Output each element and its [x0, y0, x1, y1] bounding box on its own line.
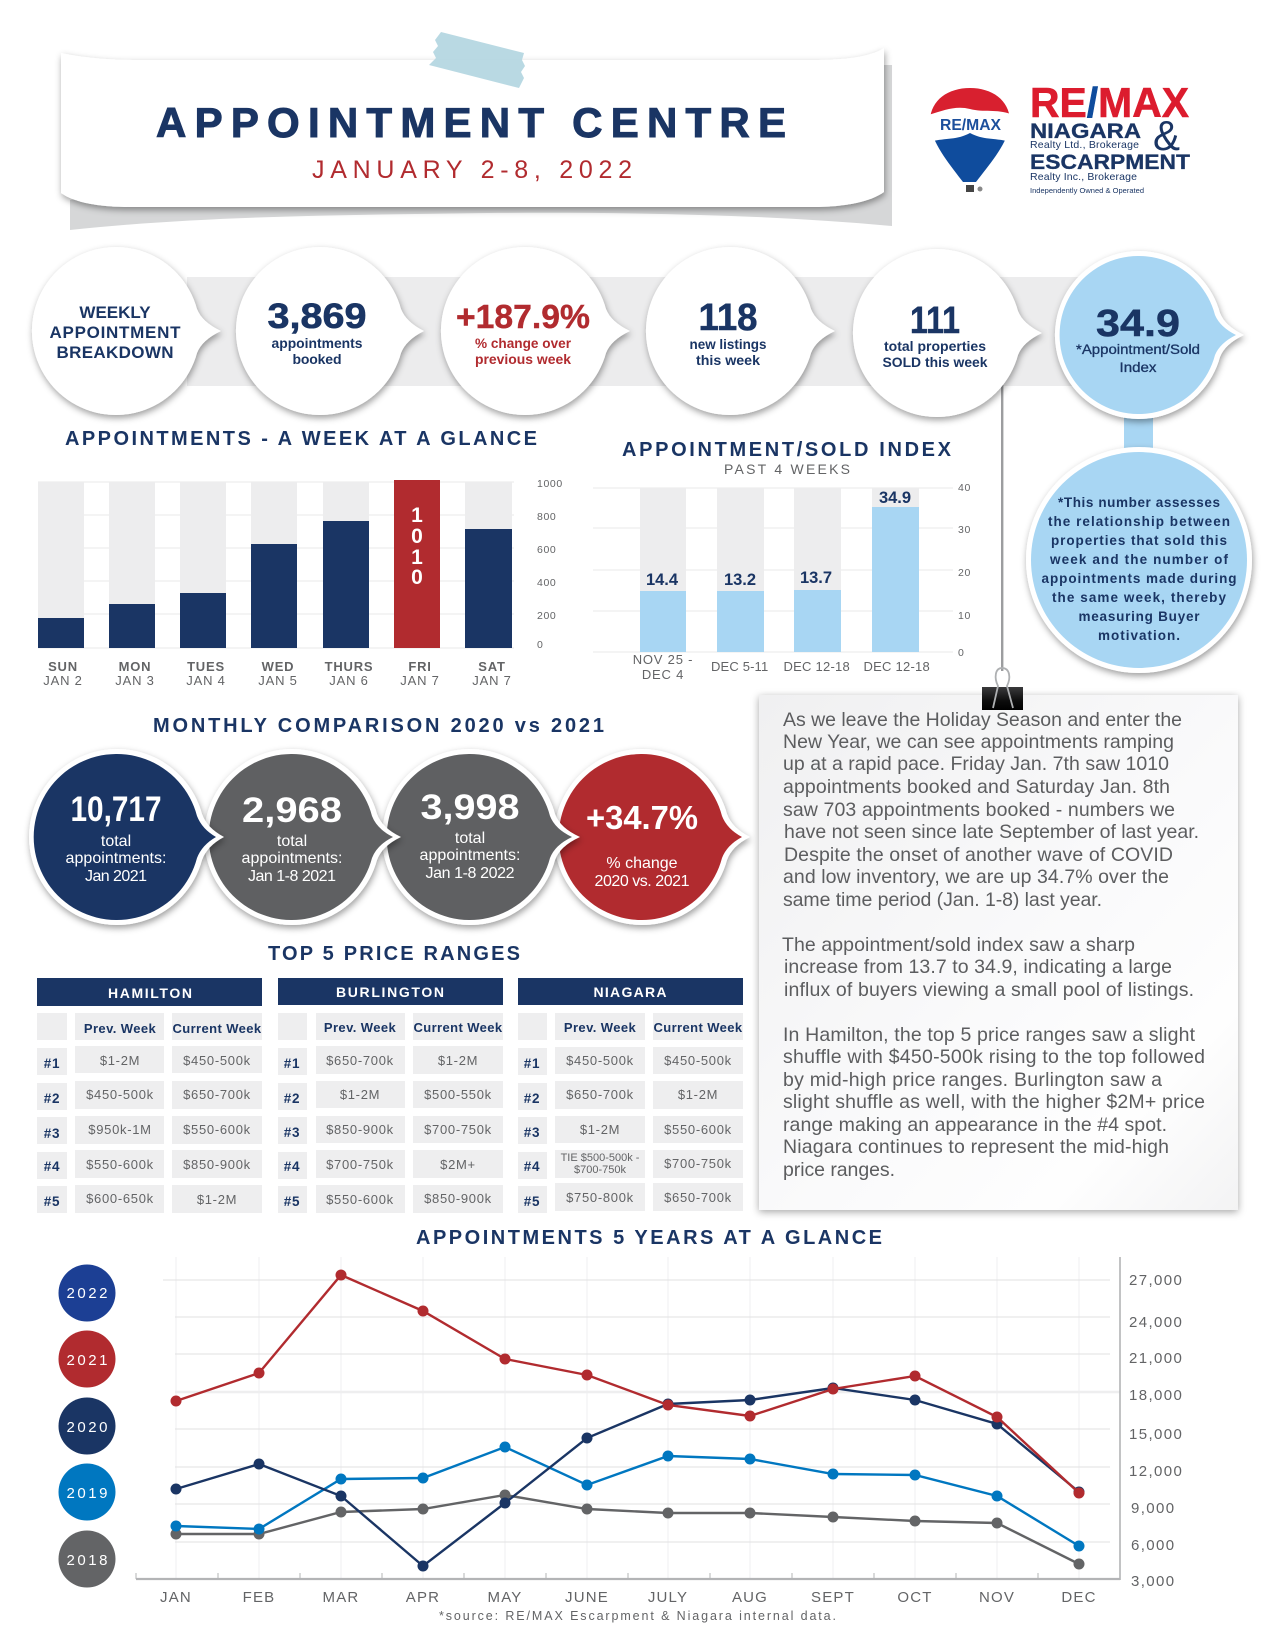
table: Hamilton: $650-700k — [183, 1087, 251, 1102]
text block: slight shuffle as well, with the higher $2M+ price — [783, 1091, 1205, 1113]
table: Niagara: $750-800k — [566, 1190, 634, 1205]
bar chart: appointment sold index: 0 — [958, 647, 964, 659]
table: Niagara: $650-700k — [566, 1087, 634, 1102]
circle: percent change over previous week: previous week — [475, 351, 571, 367]
callout: index explanation — [1026, 447, 1252, 673]
table: Hamilton: #3 — [44, 1126, 60, 1141]
table: Burlington: $500-550k — [424, 1087, 492, 1102]
callout: index explanation: properties that sold this — [1051, 533, 1227, 548]
text block: The appointment/sold index saw a sharp — [782, 934, 1135, 956]
table: Niagara: TIE $500-500k - — [561, 1152, 640, 1164]
x axis labels: MAY — [488, 1589, 522, 1606]
legend 2020: 2020 — [66, 1419, 108, 1436]
logo: RE/MAX Niagara and Escarpment: & — [1153, 112, 1180, 159]
x axis labels: FEB — [243, 1589, 275, 1606]
y axis labels: 3,000 — [1131, 1573, 1176, 1590]
circle: total properties sold: SOLD this week — [882, 354, 988, 370]
table: Hamilton: #1 — [44, 1056, 60, 1071]
bar chart: appointments by day: THURS — [325, 659, 373, 674]
callout: index explanation: motivation. — [1098, 628, 1180, 643]
heading: appointment sold index: APPOINTMENT/SOLD INDEX — [622, 439, 952, 461]
table: Burlington: $850-900k — [326, 1122, 394, 1137]
bar chart: appointment sold index: 10 — [958, 610, 971, 622]
heading: week at a glance: APPOINTMENTS - A WEEK AT A GLANCE — [65, 428, 537, 450]
text block: influx of buyers viewing a small pool of listings. — [784, 979, 1194, 1001]
text block: up at a rapid pace. Friday Jan. 7th saw 1010 — [783, 753, 1169, 775]
date text: JANUARY 2-8, 2022 — [312, 156, 632, 184]
table: Niagara: #2 — [524, 1091, 540, 1106]
legend 2019 — [58, 1464, 116, 1520]
logo: RE/MAX Niagara and Escarpment: Realty Inc., Brokerage — [1030, 171, 1137, 183]
bar chart: appointment sold index: DEC 5-11 — [711, 659, 769, 674]
table: Hamilton: $450-500k — [86, 1087, 154, 1102]
text block: Despite the onset of another wave of COVID — [784, 844, 1173, 866]
circle: weekly appointment breakdown — [32, 247, 221, 415]
series 2021 — [170, 1270, 1084, 1498]
x axis labels: NOV — [979, 1589, 1015, 1606]
legend 2022: 2022 — [66, 1285, 108, 1302]
x axis labels: OCT — [897, 1589, 933, 1606]
circle: weekly appointment breakdown: WEEKLY — [79, 303, 151, 322]
circle: appointments booked: 3,869 — [268, 297, 366, 336]
bar chart: appointment sold index: DEC 4 — [642, 667, 684, 682]
bar chart: appointments by day: JAN 7 — [472, 673, 512, 688]
table: Niagara: $650-700k — [664, 1190, 732, 1205]
bar chart: appointment sold index: 13.2 — [724, 571, 756, 589]
bar chart: appointment sold index: DEC 12-18 — [784, 659, 850, 674]
circle: appointment sold index — [1055, 251, 1244, 419]
table: Burlington: $1-2M — [438, 1053, 478, 1068]
banner paper — [61, 48, 884, 207]
table: Hamilton: $450-500k — [183, 1053, 251, 1068]
circle: appointments booked: appointments — [272, 335, 363, 351]
table: Burlington: $700-750k — [424, 1122, 492, 1137]
heading: appointment sold index — [622, 439, 952, 477]
logo: RE/MAX Niagara and Escarpment — [925, 79, 1190, 195]
heading: top 5 price ranges: TOP 5 PRICE RANGES — [268, 943, 520, 965]
x axis labels: JULY — [648, 1589, 688, 1606]
series 2020 — [170, 1382, 1084, 1572]
y axis labels: 15,000 — [1129, 1426, 1183, 1443]
table: Niagara: Current Week — [653, 1020, 743, 1035]
legend 2019: 2019 — [66, 1485, 108, 1502]
table: Niagara: NIAGARA — [594, 984, 666, 1000]
bar chart: appointments by day: SUN — [48, 659, 78, 674]
legend 2020 — [58, 1398, 116, 1454]
circle: appointment sold index: 34.9 — [1096, 303, 1180, 345]
bar chart: appointment sold index: 30 — [958, 524, 971, 536]
table: Burlington: $650-700k — [326, 1053, 394, 1068]
table: Niagara: #1 — [524, 1056, 540, 1071]
bar chart: appointments by day: JAN 6 — [329, 673, 369, 688]
bar chart: appointments by day: 0 — [411, 525, 423, 548]
y axis labels: 6,000 — [1131, 1537, 1176, 1554]
callout: index explanation: *This number assesses — [1058, 495, 1220, 510]
table: Hamilton: $1-2M — [197, 1192, 237, 1207]
circle: total appointments Jan 1-8 2021: 2,968 — [242, 791, 342, 830]
bar chart: appointment sold index: 40 — [958, 482, 971, 494]
table: Burlington: $550-600k — [326, 1192, 394, 1207]
circle: total appointments Jan 1-8 2021: total — [277, 833, 307, 850]
heading: five years at a glance: APPOINTMENTS 5 YEARS AT A GLANCE — [416, 1227, 882, 1249]
bar chart: appointments by day: FRI — [408, 659, 432, 674]
table: Niagara: #5 — [524, 1194, 540, 1209]
line chart: appointments five years — [136, 1257, 1183, 1606]
circle: new listings: new listings — [690, 336, 767, 352]
bar chart: appointments by day: 800 — [537, 511, 556, 523]
bar chart: appointment sold index: NOV 25 - — [633, 652, 693, 667]
text block: appointments booked and Saturday Jan. 8th — [783, 776, 1170, 798]
bar chart: appointment sold index — [593, 482, 971, 682]
table: Hamilton: $950k-1M — [88, 1122, 152, 1137]
connector: index to callout — [1124, 415, 1153, 450]
table: Burlington: $1-2M — [340, 1087, 380, 1102]
bar chart: appointments by day — [38, 478, 563, 688]
text block: have not seen since late September of last year. — [784, 821, 1199, 843]
logo: RE/MAX Niagara and Escarpment: Independently Owned & Operated — [1030, 186, 1144, 195]
axes — [136, 1257, 1120, 1580]
x axis labels: SEPT — [811, 1589, 855, 1606]
circle: appointment sold index: *Appointment/Sold — [1076, 342, 1200, 357]
bar chart: appointments by day: 1 — [411, 504, 423, 527]
icon: binder clip — [982, 668, 1023, 710]
circle: total properties sold: total properties — [884, 338, 986, 354]
table: Burlington: Prev. Week — [324, 1020, 396, 1035]
circle: appointment sold index: Index — [1120, 360, 1157, 375]
table: Hamilton: Prev. Week — [84, 1021, 156, 1036]
text block: price ranges. — [783, 1159, 895, 1181]
table: Niagara: #4 — [524, 1159, 540, 1174]
x axis labels: JAN — [160, 1589, 192, 1606]
circle: total properties sold: 111 — [910, 300, 960, 342]
heading: appointment sold index: PAST 4 WEEKS — [724, 461, 850, 477]
heading: monthly comparison: MONTHLY COMPARISON 2020 vs 2021 — [153, 715, 604, 737]
text block: by mid-high price ranges. Burlington saw a — [783, 1069, 1162, 1091]
bar chart: appointments by day: 200 — [537, 610, 556, 622]
circle: total appointments Jan 1-8 2022: appointments: — [420, 847, 520, 864]
x axis labels: MAR — [323, 1589, 359, 1606]
legend 2018 — [58, 1530, 116, 1588]
circle: total appointments Jan 1-8 2022: Jan 1-8 2022 — [426, 865, 515, 882]
circle: total appointments Jan 1-8 2022: 3,998 — [420, 788, 520, 827]
circle: percent change 2020 vs 2021 — [554, 749, 750, 925]
icon: hot air balloon: RE/MAX — [940, 117, 1001, 134]
circle: total properties sold — [853, 249, 1042, 417]
table: Hamilton: HAMILTON — [108, 985, 192, 1001]
text block: Niagara continues to represent the mid-high — [783, 1136, 1169, 1158]
table: Hamilton: $1-2M — [100, 1053, 140, 1068]
circle: new listings — [646, 247, 835, 415]
logo: RE/MAX Niagara and Escarpment: NIAGARA — [1030, 120, 1141, 143]
circle: appointments booked: booked — [292, 351, 342, 367]
table: Hamilton: #5 — [44, 1194, 60, 1209]
table: Hamilton: #2 — [44, 1091, 60, 1106]
circle: total appointments Jan 2021: Jan 2021 — [85, 868, 147, 885]
table: Niagara: Prev. Week — [564, 1020, 636, 1035]
table: Burlington: #1 — [284, 1056, 300, 1071]
table: Burlington — [278, 978, 503, 1213]
table: Niagara: $700-750k — [664, 1156, 732, 1171]
circle: weekly appointment breakdown: BREAKDOWN — [56, 343, 174, 362]
bar chart: appointments by day: 1 — [411, 546, 423, 569]
legend 2022 — [58, 1264, 116, 1322]
circle: total appointments Jan 1-8 2022 — [382, 749, 580, 925]
callout: index explanation: measuring Buyer — [1078, 609, 1200, 624]
circle: total appointments Jan 2021 — [29, 749, 224, 925]
circle: new listings: 118 — [698, 297, 758, 339]
circle: total appointments Jan 1-8 2021: Jan 1-8 2021 — [248, 868, 336, 885]
text block: saw 703 appointments booked - numbers we — [783, 799, 1175, 821]
callout: index explanation: the relationship between — [1048, 514, 1230, 529]
bar chart: appointments by day: MON — [119, 659, 151, 674]
table: Niagara — [518, 978, 743, 1213]
table: Hamilton: $850-900k — [183, 1157, 251, 1172]
circle: percent change over previous week: % change over — [475, 335, 572, 351]
bar chart: appointments by day: JAN 3 — [115, 673, 155, 688]
bar chart: appointment sold index: 14.4 — [646, 571, 679, 589]
bar chart: appointment sold index: DEC 12-18 — [864, 659, 930, 674]
text block: same time period (Jan. 1-8) last year. — [783, 889, 1102, 911]
table: Niagara: $1-2M — [678, 1087, 718, 1102]
bar chart: appointments by day: JAN 5 — [258, 673, 298, 688]
bar chart: appointments by day: TUES — [187, 659, 225, 674]
text block: range making an appearance in the #4 spot. — [783, 1114, 1167, 1136]
circle: percent change over previous week: +187.9% — [456, 298, 590, 335]
circle: total appointments Jan 2021: total — [101, 833, 131, 850]
table: Niagara: $1-2M — [580, 1122, 620, 1137]
y axis labels — [1129, 1272, 1183, 1590]
bar chart: appointments by day: 0 — [411, 566, 423, 589]
bar chart: appointments by day: JAN 4 — [186, 673, 226, 688]
y axis labels: 9,000 — [1131, 1500, 1176, 1517]
x axis labels: APR — [406, 1589, 440, 1606]
callout: index explanation: the same week, thereby — [1052, 590, 1226, 605]
circle: percent change 2020 vs 2021: % change — [606, 855, 678, 872]
circle: total appointments Jan 2021: appointments: — [66, 850, 166, 867]
table: Niagara: $550-600k — [664, 1122, 732, 1137]
text block: In Hamilton, the top 5 price ranges saw a slight — [783, 1024, 1196, 1046]
bar chart: appointments by day: 400 — [537, 577, 556, 589]
table: Burlington: $2M+ — [440, 1157, 476, 1172]
panel: commentary — [759, 668, 1238, 1210]
series 2018 — [170, 1490, 1084, 1570]
bar chart: appointments by day: WED — [262, 659, 294, 674]
series 2019 — [170, 1442, 1084, 1552]
title banner — [61, 32, 892, 230]
text block: and low inventory, we are up 34.7% over the — [783, 866, 1169, 888]
legend: years — [58, 1264, 116, 1588]
table: Niagara: $700-750k — [574, 1164, 626, 1176]
table: Hamilton: Current Week — [172, 1021, 262, 1036]
bar chart: appointments by day: 600 — [537, 544, 556, 556]
title text: APPOINTMENT CENTRE — [156, 99, 786, 146]
logo: RE/MAX Niagara and Escarpment: ESCARPMENT — [1030, 151, 1190, 174]
table: Niagara: $450-500k — [664, 1053, 732, 1068]
text block: shuffle with $450-500k rising to the top followed — [783, 1046, 1205, 1068]
table: Burlington: $700-750k — [326, 1157, 394, 1172]
bar chart: appointments by day: 0 — [537, 639, 543, 651]
table: Burlington: #5 — [284, 1194, 300, 1209]
table: Burlington: #3 — [284, 1125, 300, 1140]
table: Hamilton: $550-600k — [183, 1122, 251, 1137]
circle: total appointments Jan 1-8 2022: total — [455, 830, 485, 847]
circle: appointments booked — [236, 247, 424, 415]
legend 2021 — [58, 1330, 116, 1388]
x axis labels: AUG — [732, 1589, 768, 1606]
bar chart: appointments by day: JAN 2 — [43, 673, 83, 688]
y axis labels: 12,000 — [1129, 1463, 1183, 1480]
icon: hot air balloon — [930, 88, 1009, 192]
source note: *source: RE/MAX Escarpment & Niagara internal data. — [439, 1609, 836, 1623]
circle: percent change 2020 vs 2021: +34.7% — [586, 799, 698, 836]
x axis labels: JUNE — [565, 1589, 609, 1606]
table: Burlington: Current Week — [413, 1020, 503, 1035]
table: Hamilton: $550-600k — [86, 1157, 154, 1172]
table: Burlington: #4 — [284, 1159, 300, 1174]
circle: new listings: this week — [696, 352, 760, 368]
text block: As we leave the Holiday Season and enter the — [783, 709, 1182, 731]
callout: index explanation: week and the number of — [1049, 552, 1228, 567]
y axis labels: 24,000 — [1129, 1314, 1183, 1331]
tape — [429, 32, 525, 88]
connector line to clip — [1001, 385, 1003, 671]
table: Niagara: #3 — [524, 1125, 540, 1140]
logo: RE/MAX Niagara and Escarpment: Realty Ltd., Brokerage — [1030, 139, 1139, 151]
text block: New Year, we can see appointments ramping — [783, 731, 1174, 753]
bar chart: appointment sold index: 34.9 — [879, 489, 911, 507]
band behind weekly circles — [187, 277, 1100, 386]
table: Hamilton: $600-650k — [86, 1191, 154, 1206]
table: Niagara: $450-500k — [566, 1053, 634, 1068]
table: Burlington: BURLINGTON — [336, 984, 444, 1000]
circle: total appointments Jan 1-8 2021 — [204, 749, 401, 925]
text block: increase from 13.7 to 34.9, indicating a large — [784, 956, 1172, 978]
circle: total appointments Jan 2021: 10,717 — [70, 790, 162, 829]
callout: index explanation: appointments made during — [1042, 571, 1236, 586]
legend 2018: 2018 — [66, 1552, 108, 1569]
circle: weekly appointment breakdown: APPOINTMENT — [50, 323, 181, 342]
circle: total appointments Jan 1-8 2021: appointments: — [242, 850, 342, 867]
table: Hamilton: #4 — [44, 1159, 60, 1174]
table: Hamilton — [37, 978, 262, 1213]
legend 2021: 2021 — [66, 1352, 108, 1369]
y axis labels: 21,000 — [1129, 1350, 1183, 1367]
brand text: RE/MAX — [1030, 79, 1189, 126]
x axis labels — [160, 1589, 1097, 1606]
text block — [782, 709, 1205, 1181]
bar chart: appointments by day: JAN 7 — [400, 673, 440, 688]
circle: percent change 2020 vs 2021: 2020 vs. 2021 — [594, 873, 690, 890]
table: Burlington: $850-900k — [424, 1191, 492, 1206]
bar chart: appointment sold index: 13.7 — [800, 569, 832, 587]
x axis labels: DEC — [1061, 1589, 1097, 1606]
y axis labels: 18,000 — [1129, 1387, 1183, 1404]
bar chart: appointments by day: SAT — [478, 659, 506, 674]
y axis labels: 27,000 — [1129, 1272, 1183, 1289]
banner back fold — [70, 65, 892, 230]
bar chart: appointments by day: 1000 — [537, 478, 563, 490]
circle: percent change over previous week — [441, 247, 630, 415]
table: Burlington: #2 — [284, 1091, 300, 1106]
bar chart: appointment sold index: 20 — [958, 567, 971, 579]
